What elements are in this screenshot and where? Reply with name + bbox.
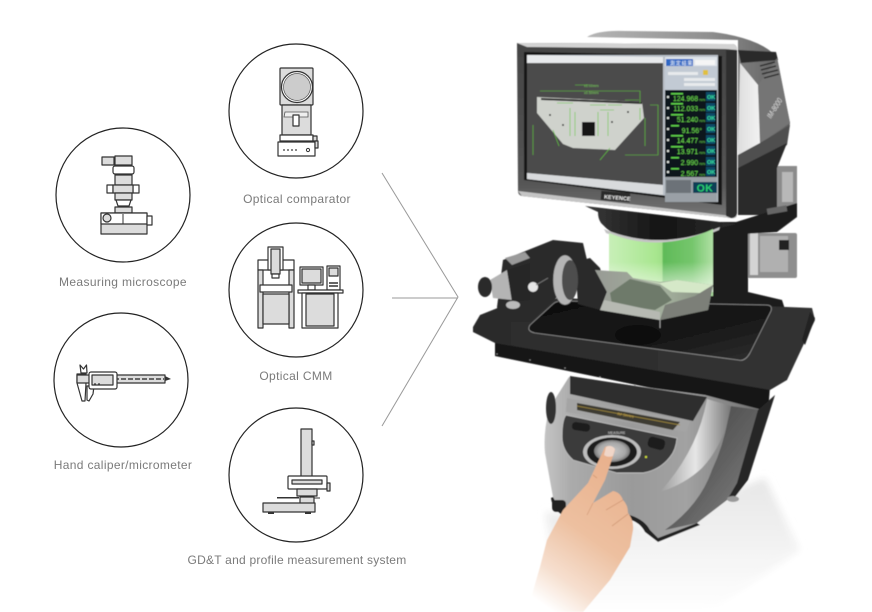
product photo: measurement machine — [473, 31, 815, 612]
measured part on screen — [533, 84, 658, 160]
results table: OK — [707, 160, 715, 166]
results table: OK — [707, 95, 715, 101]
label: GD&T system: GD&T and profile measurement system — [188, 553, 406, 567]
rotary fixture — [478, 240, 607, 322]
control panel — [562, 398, 690, 473]
workpiece — [595, 270, 713, 328]
hand pressing the button — [527, 446, 633, 612]
brand mark: IM-8000 — [765, 96, 785, 120]
floor reflection — [545, 478, 800, 612]
results table — [665, 90, 717, 178]
results table: 112.033 mm — [673, 106, 705, 113]
results table: 14.477 mm — [677, 138, 705, 145]
icon: optical CMM — [258, 247, 343, 328]
arrow: converging chevron — [382, 173, 458, 426]
results table: OK — [707, 138, 715, 144]
side panel — [665, 57, 717, 69]
results table: 13.971 mm — [677, 149, 705, 156]
arm bracket — [720, 203, 797, 234]
under-stage screen — [570, 376, 707, 421]
measured part on screen: ±0.50mm — [584, 91, 599, 95]
control panel: IM Series — [617, 411, 634, 419]
KEYENCE logo: KEYENCE — [604, 195, 631, 203]
screen: 測定結果 — [670, 60, 693, 67]
label: optical comparator: Optical comparator — [243, 192, 351, 206]
icon: measuring microscope — [101, 156, 152, 234]
label: measuring microscope: Measuring microscope — [59, 275, 187, 289]
stage — [473, 298, 815, 412]
results table: OK — [707, 149, 715, 155]
results table: OK — [707, 106, 715, 112]
results table: OK — [707, 116, 715, 122]
joystick dial — [583, 435, 641, 469]
monitor bezel — [517, 43, 737, 218]
icon: optical comparator — [278, 68, 318, 156]
lens collar — [585, 206, 736, 246]
panel: GD&T and profile measurement system — [188, 408, 406, 567]
results table: 51.240 mm — [677, 117, 705, 124]
screen: OK — [697, 182, 713, 194]
label: hand caliper/micrometer: Hand caliper/micrometer — [54, 458, 192, 472]
results table: OK — [707, 170, 715, 176]
icon: GD&T system — [263, 429, 330, 514]
control panel: MEASURE — [608, 431, 626, 435]
panel: hand caliper/micrometer — [54, 313, 192, 472]
panel: optical comparator — [229, 44, 363, 206]
panel: measuring microscope — [56, 128, 190, 289]
results table: 2.567 mm — [681, 171, 705, 178]
results table: OK — [707, 127, 715, 133]
panel: optical CMM — [229, 223, 363, 383]
measured part on screen: ±1.00mm — [584, 84, 599, 88]
label: optical CMM: Optical CMM — [259, 369, 333, 383]
screen — [527, 55, 718, 202]
machine base — [545, 376, 775, 542]
green light column — [609, 229, 713, 296]
housing hood — [587, 31, 790, 215]
OK indicator — [693, 182, 717, 193]
rear bracket — [747, 166, 797, 278]
results table: 124.968 mm — [673, 96, 705, 103]
KEYENCE logo — [601, 191, 631, 203]
icon: hand caliper — [77, 365, 171, 401]
results table: 2.990 mm — [681, 160, 705, 167]
results table: 91.56° — [682, 127, 702, 135]
rear column — [690, 222, 790, 325]
